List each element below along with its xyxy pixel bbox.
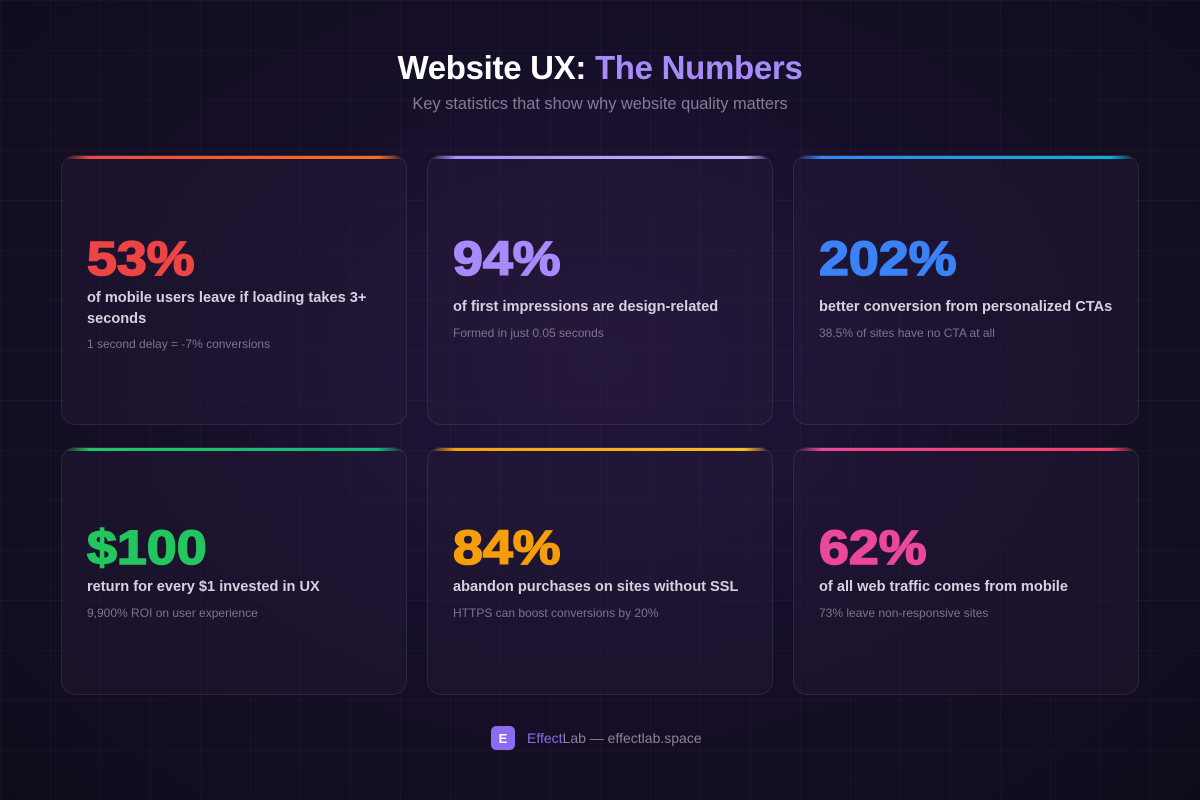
icon: logo (491, 726, 515, 750)
note: 38.5% of sites have no CTA at all (819, 326, 995, 340)
stat number: 84% (453, 522, 561, 575)
stat number: $100 (87, 522, 207, 575)
stat text: abandon purchases on sites without SSL (453, 579, 738, 595)
footer (491, 726, 702, 750)
panel: mobile traffic (793, 447, 1139, 695)
stat text: of all web traffic comes from mobile (819, 579, 1068, 595)
note: 73% leave non-responsive sites (819, 606, 988, 620)
panel: CTAs (793, 155, 1139, 425)
panel: SSL (427, 447, 773, 695)
note: 9,900% ROI on user experience (87, 606, 258, 620)
stat number: 94% (453, 233, 561, 286)
title: Website UX: The Numbers (397, 49, 803, 86)
icon: logo: E (499, 730, 507, 746)
stat number: 53% (87, 233, 195, 286)
note: 1 second delay = -7% conversions (87, 337, 270, 351)
stat number: 202% (819, 233, 956, 286)
stat text: of first impressions are design-related (453, 299, 718, 315)
stat number: 62% (819, 522, 927, 575)
stat text: of mobile users leave if loading takes 3+ seconds (87, 290, 366, 327)
panel: mobile load (61, 155, 407, 425)
subtitle: Key statistics that show why website quality matters (412, 95, 788, 113)
note: Formed in just 0.05 seconds (453, 326, 604, 340)
panel: UX ROI (61, 447, 407, 695)
stat text: better conversion from personalized CTAs (819, 299, 1112, 315)
stat text: return for every $1 invested in UX (87, 579, 320, 595)
note: HTTPS can boost conversions by 20% (453, 606, 658, 620)
panel: first impressions (427, 155, 773, 425)
footer: EffectLab — effectlab.space (527, 730, 702, 746)
